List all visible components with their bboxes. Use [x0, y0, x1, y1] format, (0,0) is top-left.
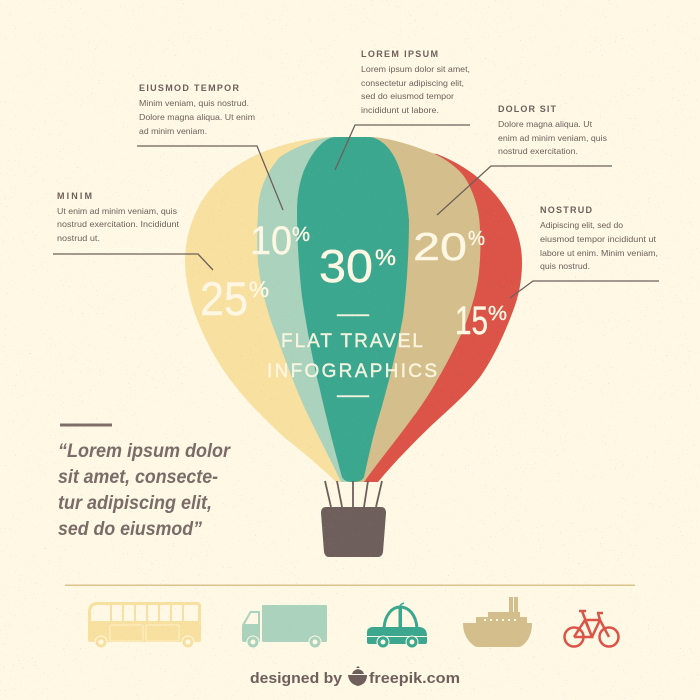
balloon segment: mint 10%: [257, 137, 352, 482]
callout: minim: [53, 191, 213, 270]
percent label: 30%: 30: [319, 240, 373, 292]
balloon segment: teal 30%: [297, 137, 409, 482]
callout: lorem ipsum: incididunt ut labore.: [361, 105, 439, 115]
callout: eiusmod tempor: Minim veniam, quis nostrud.: [139, 98, 249, 108]
callout: eiusmod tempor: EIUSMOD TEMPOR: [139, 83, 240, 93]
percent label: 30%: %: [375, 245, 396, 270]
callout: lorem ipsum: consectetur adipiscing elit,: [361, 78, 464, 88]
quote: tur adipiscing elit,: [58, 493, 212, 514]
callout: nostrud: labore ut enim. Minim veniam,: [540, 248, 658, 258]
credit: designed by freepik: [250, 666, 460, 687]
callout: nostrud: [510, 205, 659, 298]
callout: dolor sit: DOLOR SIT: [498, 104, 556, 114]
percent label: 20%: 20: [413, 226, 467, 269]
callout: eiusmod tempor: ad minim veniam.: [139, 126, 207, 136]
quote: “Lorem ipsum dolor: [58, 441, 232, 462]
balloon ropes: [325, 481, 382, 507]
icon: car: [367, 603, 427, 648]
percent label: 15%: 15: [455, 299, 488, 343]
title: FLAT TRAVEL: [281, 331, 423, 352]
callout: lorem ipsum: LOREM IPSUM: [361, 49, 438, 59]
callout: lorem ipsum: Lorem ipsum dolor sit amet,: [361, 64, 470, 74]
callout: nostrud: Adipiscing elit, sed do: [540, 220, 623, 230]
percent label: 20%: %: [468, 228, 485, 250]
callout: minim: MINIM: [57, 191, 92, 201]
percent label: 30%: [319, 240, 396, 292]
percent label: 10%: 10: [250, 219, 292, 263]
title: INFOGRAPHICS: [267, 361, 437, 382]
callout: eiusmod tempor: Dolore magna aliqua. Ut enim: [139, 112, 255, 122]
percent label: 15%: %: [488, 303, 507, 325]
balloon segment: tan 20%: [352, 137, 480, 482]
percent label: 25%: 25: [200, 272, 248, 325]
credit: designed by freepik: freepik.com: [369, 670, 460, 687]
callout: dolor sit: enim ad minim veniam, quis: [498, 133, 607, 143]
icon: ship: [463, 597, 532, 647]
callout: nostrud: quis nostrud.: [540, 261, 590, 271]
quote: sed do eiusmod”: [58, 519, 202, 540]
callout: minim: Ut enim ad minim veniam, quis: [57, 206, 177, 216]
percent label: 25%: %: [249, 277, 269, 302]
callout: nostrud: eiusmod tempor incididunt ut: [540, 234, 657, 244]
callout: eiusmod tempor: [137, 83, 283, 210]
icon: bus: [88, 602, 201, 648]
quote: [58, 424, 232, 540]
balloon segment: red 15%: [360, 150, 522, 482]
quote: sit amet, consecte-: [58, 467, 218, 488]
callout: minim: nostrud ut.: [57, 233, 100, 243]
callout: lorem ipsum: sed do eiusmod tempor: [361, 91, 454, 101]
callout: nostrud: NOSTRUD: [540, 205, 592, 215]
percent label: 20%: [413, 226, 485, 269]
icon: bicycle: [564, 611, 618, 646]
balloon segment: yellow 25%: [185, 137, 352, 482]
callout: dolor sit: [437, 104, 612, 215]
icon: truck: [242, 605, 327, 648]
percent label: 10%: %: [292, 224, 310, 246]
balloon: [185, 137, 522, 482]
callout: minim: nostrud exercitation. Incididunt: [57, 219, 180, 229]
callout: dolor sit: Dolore magna aliqua. Ut: [498, 119, 593, 129]
callout: dolor sit: nostrud exercitation.: [498, 146, 578, 156]
credit: designed by freepik: designed by: [250, 670, 343, 687]
callout: lorem ipsum: [335, 49, 470, 170]
title: [267, 314, 437, 397]
basket: [321, 507, 386, 557]
